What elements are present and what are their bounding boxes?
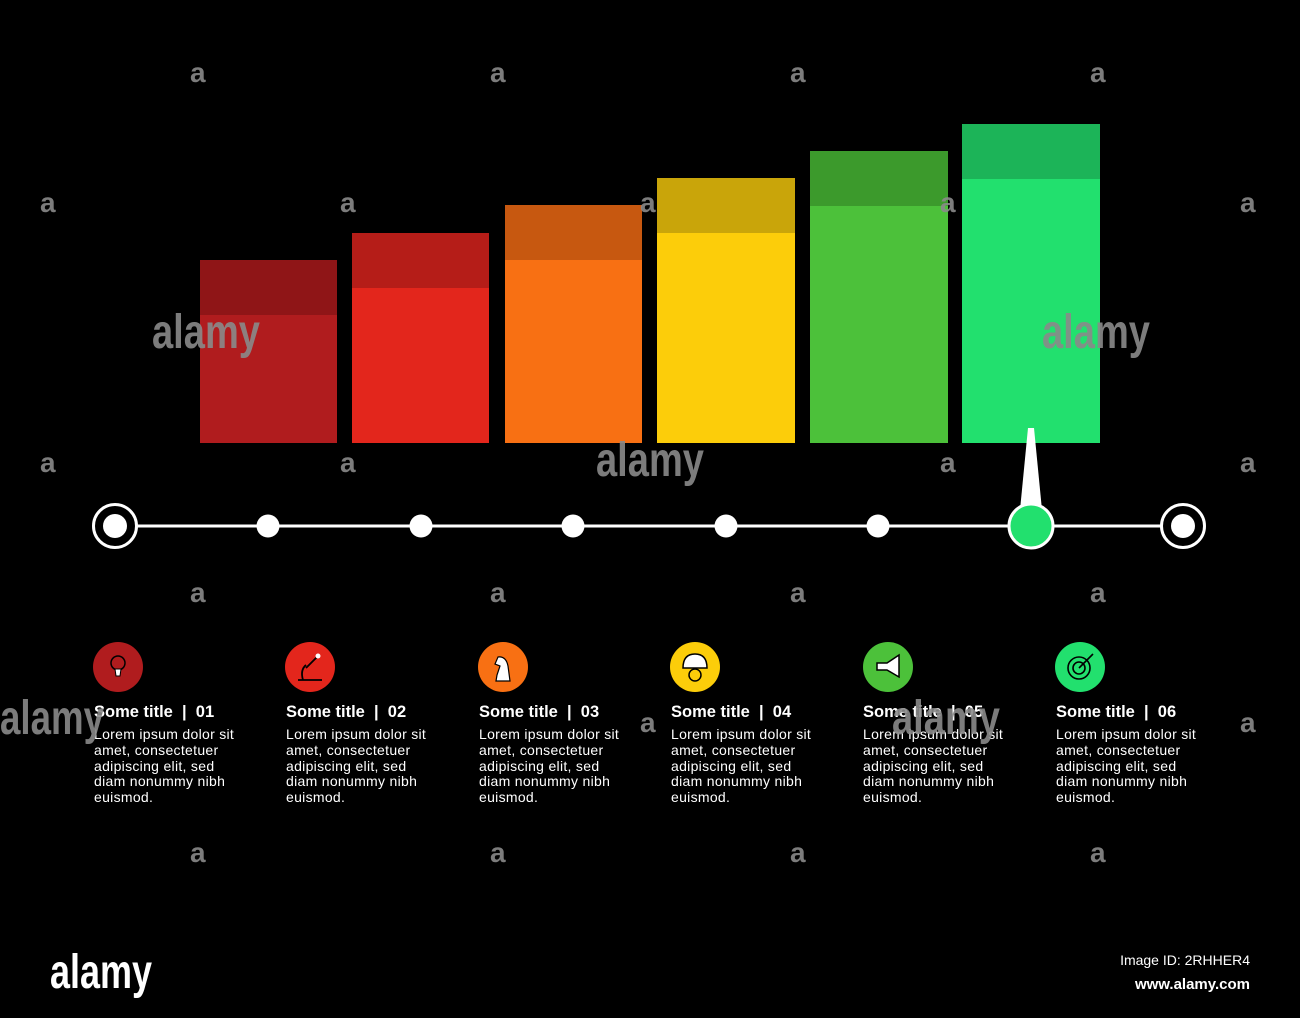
- watermark: a: [790, 577, 806, 608]
- block 05: Some title | 05: [863, 703, 983, 721]
- icon: target: [1055, 642, 1105, 692]
- bar 2: [352, 233, 489, 443]
- bar 5: [810, 151, 948, 443]
- watermark: a: [490, 57, 506, 88]
- icon: bulb: [93, 642, 143, 692]
- block 02: Lorem ipsum dolor sit: [286, 726, 426, 742]
- bar 3: [505, 205, 642, 443]
- block 03: Some title | 03: [479, 703, 599, 721]
- bar 1: [200, 260, 337, 443]
- block 01: [94, 703, 234, 805]
- block 03: [479, 703, 619, 805]
- watermark: a: [790, 57, 806, 88]
- watermark: a: [790, 837, 806, 868]
- watermark: a: [1090, 837, 1106, 868]
- text blocks: [94, 703, 1196, 805]
- block 04: [671, 703, 811, 805]
- block 01: amet, consectetuer: [94, 742, 218, 758]
- watermark: a: [940, 447, 956, 478]
- image id: [1120, 952, 1250, 993]
- watermark: a: [40, 187, 56, 218]
- bar chart: [200, 124, 1100, 443]
- bar 6: [962, 124, 1100, 443]
- watermark: a: [640, 707, 656, 738]
- block 03: euismod.: [479, 789, 538, 805]
- alamy logo: alamy: [50, 946, 152, 999]
- block 02: amet, consectetuer: [286, 742, 410, 758]
- block 05: euismod.: [863, 789, 922, 805]
- block 03: adipiscing elit, sed: [479, 758, 599, 774]
- block 02: euismod.: [286, 789, 345, 805]
- block 02: adipiscing elit, sed: [286, 758, 406, 774]
- pointer marker: [1009, 428, 1053, 548]
- watermark: [0, 57, 1256, 868]
- watermark: a: [40, 447, 56, 478]
- watermark: a: [640, 187, 656, 218]
- block 03: Lorem ipsum dolor sit: [479, 726, 619, 742]
- image id: Image ID: 2RHHER4: [1120, 952, 1250, 968]
- block 03: diam nonummy nibh: [479, 773, 610, 789]
- watermark: a: [190, 837, 206, 868]
- block 06: Some title | 06: [1056, 703, 1176, 721]
- watermark: a: [490, 837, 506, 868]
- watermark: a: [190, 577, 206, 608]
- watermark: a: [190, 57, 206, 88]
- block 04: amet, consectetuer: [671, 742, 795, 758]
- watermark: a: [490, 577, 506, 608]
- block 01: diam nonummy nibh: [94, 773, 225, 789]
- block 05: Lorem ipsum dolor sit: [863, 726, 1003, 742]
- block 06: Lorem ipsum dolor sit: [1056, 726, 1196, 742]
- watermark: alamy: [1042, 306, 1150, 359]
- icon: megaphone: [863, 642, 913, 692]
- block 04: euismod.: [671, 789, 730, 805]
- icon: chess knight: [478, 642, 528, 692]
- timeline: [94, 504, 1204, 548]
- block 01: euismod.: [94, 789, 153, 805]
- block 06: euismod.: [1056, 789, 1115, 805]
- watermark: a: [340, 187, 356, 218]
- block 06: diam nonummy nibh: [1056, 773, 1187, 789]
- block 02: Some title | 02: [286, 703, 406, 721]
- icon: microscope: [285, 642, 335, 692]
- watermark: alamy: [596, 434, 704, 487]
- watermark: a: [1240, 187, 1256, 218]
- image id: www.alamy.com: [1134, 976, 1250, 993]
- watermark: alamy: [892, 692, 1000, 745]
- block 05: diam nonummy nibh: [863, 773, 994, 789]
- watermark: a: [1090, 57, 1106, 88]
- block 06: amet, consectetuer: [1056, 742, 1180, 758]
- block 06: [1056, 703, 1196, 805]
- block 05: amet, consectetuer: [863, 742, 987, 758]
- block 05: adipiscing elit, sed: [863, 758, 983, 774]
- watermark: a: [340, 447, 356, 478]
- block 03: amet, consectetuer: [479, 742, 603, 758]
- block 05: [863, 703, 1003, 805]
- bar 4: [657, 178, 795, 443]
- block 02: [286, 703, 426, 805]
- block 06: adipiscing elit, sed: [1056, 758, 1176, 774]
- block 04: Lorem ipsum dolor sit: [671, 726, 811, 742]
- watermark: a: [1240, 707, 1256, 738]
- watermark: a: [940, 187, 956, 218]
- block 01: adipiscing elit, sed: [94, 758, 214, 774]
- block 04: Some title | 04: [671, 703, 792, 721]
- block 04: adipiscing elit, sed: [671, 758, 791, 774]
- icon: helmet gear: [670, 642, 720, 692]
- block 02: diam nonummy nibh: [286, 773, 417, 789]
- watermark: a: [1240, 447, 1256, 478]
- watermark: alamy: [0, 692, 104, 745]
- watermark: a: [1090, 577, 1106, 608]
- watermark: alamy: [152, 306, 260, 359]
- block 01: Some title | 01: [94, 703, 214, 721]
- block 01: Lorem ipsum dolor sit: [94, 726, 234, 742]
- block 04: diam nonummy nibh: [671, 773, 802, 789]
